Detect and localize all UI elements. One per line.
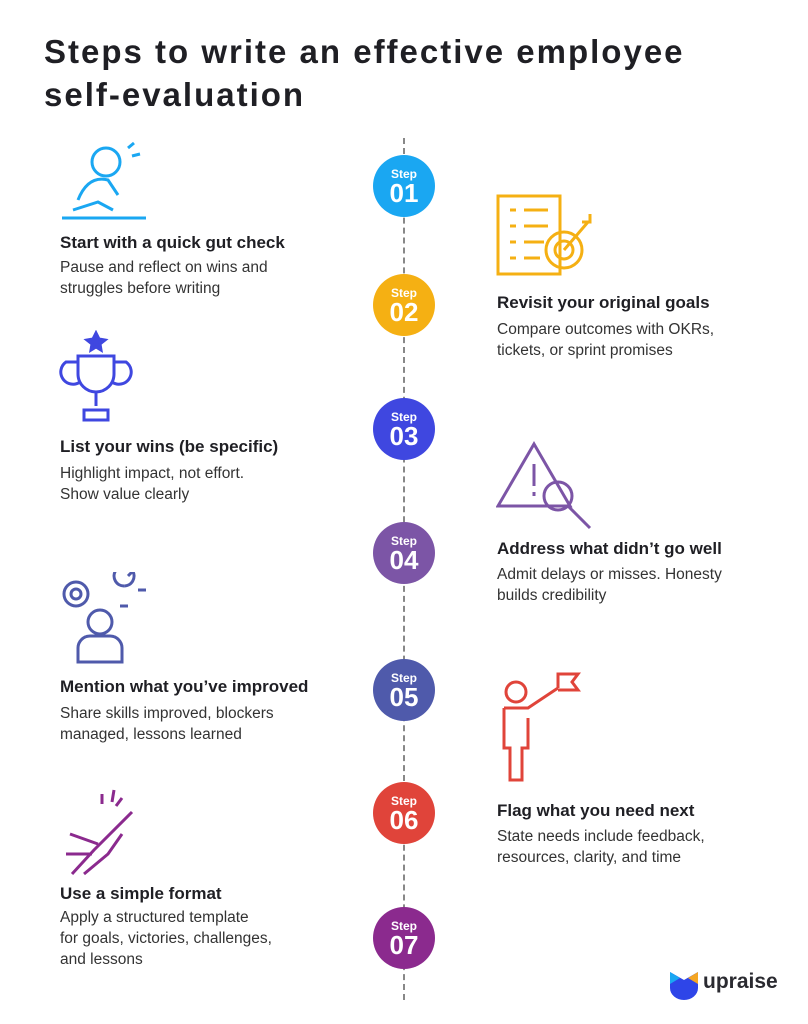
step 4 text: builds credibility xyxy=(497,587,606,604)
step 5 heading: Mention what you’ve improved xyxy=(60,677,308,696)
step 05 circle: Step xyxy=(391,671,417,685)
step 02 circle: 02 xyxy=(390,297,418,327)
step 06 circle xyxy=(373,782,435,844)
icon: person with flag xyxy=(502,672,581,782)
icon: snapping fingers xyxy=(66,790,133,876)
title xyxy=(44,33,685,113)
logo: upraise xyxy=(670,970,778,1000)
step 05 circle: 05 xyxy=(390,682,418,712)
step 01 circle xyxy=(373,155,435,217)
step 3 text: Highlight impact, not effort. xyxy=(60,465,244,482)
title: Steps to write an effective employee xyxy=(44,33,685,70)
step 2 text xyxy=(497,321,714,359)
step 02 circle: Step xyxy=(391,286,417,300)
step 04 circle: 04 xyxy=(390,545,418,575)
step 07 circle: Step xyxy=(391,919,417,933)
step 5 text: managed, lessons learned xyxy=(60,726,242,743)
step 7 text xyxy=(60,909,272,968)
step 5 text xyxy=(60,705,274,743)
title: self-evaluation xyxy=(44,76,305,113)
icon: goals checklist xyxy=(496,194,592,276)
step 2 heading: Revisit your original goals xyxy=(497,293,710,312)
step 04 circle: Step xyxy=(391,534,417,548)
step 03 circle xyxy=(373,398,435,460)
step 05 circle xyxy=(373,659,435,721)
step 7 text: and lessons xyxy=(60,951,143,968)
step 06 circle: Step xyxy=(391,794,417,808)
logo: upraise: upraise xyxy=(703,970,778,993)
step 04 circle xyxy=(373,522,435,584)
step 1 text: Pause and reflect on wins and xyxy=(60,259,268,276)
step 6 text: resources, clarity, and time xyxy=(497,849,681,866)
step 6 heading: Flag what you need next xyxy=(497,801,694,820)
icon: warning magnifier xyxy=(496,441,591,529)
step 6 text xyxy=(497,828,705,866)
timeline line xyxy=(403,138,405,1000)
step 3 text: Show value clearly xyxy=(60,486,189,503)
step 03 circle: Step xyxy=(391,410,417,424)
step 02 circle xyxy=(373,274,435,336)
step 01 circle: 01 xyxy=(390,178,418,208)
step 4 text: Admit delays or misses. Honesty xyxy=(497,566,722,583)
step 07 circle: 07 xyxy=(390,930,418,960)
step 2 text: tickets, or sprint promises xyxy=(497,342,673,359)
step 1 text xyxy=(60,259,268,297)
step 3 heading: List your wins (be specific) xyxy=(60,437,278,456)
step 6 text: State needs include feedback, xyxy=(497,828,705,845)
icon: person gear bulb xyxy=(62,572,146,664)
step 2 text: Compare outcomes with OKRs, xyxy=(497,321,714,338)
icon: trophy xyxy=(59,330,133,422)
step 3 text xyxy=(60,465,244,503)
step 1 text: struggles before writing xyxy=(60,280,220,297)
step 5 text: Share skills improved, blockers xyxy=(60,705,274,722)
step 7 text: Apply a structured template xyxy=(60,909,249,926)
step 7 heading: Use a simple format xyxy=(60,884,222,903)
step 7 text: for goals, victories, challenges, xyxy=(60,930,272,947)
step 1 heading: Start with a quick gut check xyxy=(60,233,285,252)
step 4 text xyxy=(497,566,722,604)
step 06 circle: 06 xyxy=(390,805,418,835)
step 07 circle xyxy=(373,907,435,969)
icon: thinking person xyxy=(62,142,146,220)
step 4 heading: Address what didn’t go well xyxy=(497,539,722,558)
step 01 circle: Step xyxy=(391,167,417,181)
step 03 circle: 03 xyxy=(390,421,418,451)
